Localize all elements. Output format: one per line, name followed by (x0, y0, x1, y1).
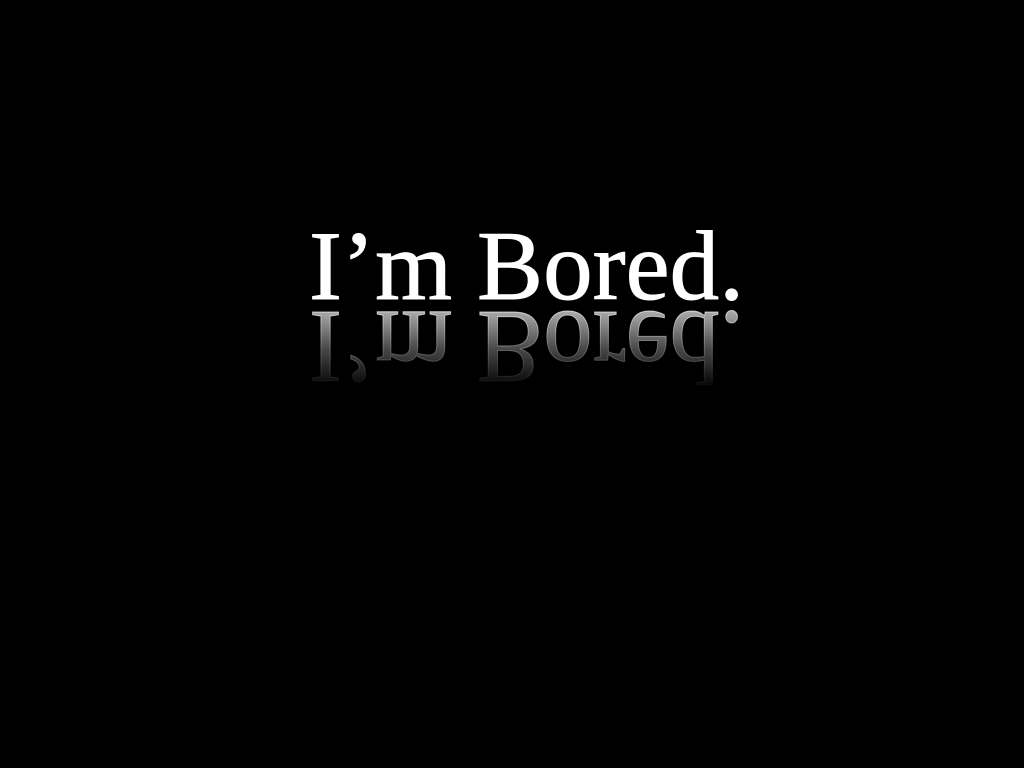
title: I’m Bored. (309, 212, 744, 321)
title reflection: I’m Bored. (309, 288, 744, 405)
